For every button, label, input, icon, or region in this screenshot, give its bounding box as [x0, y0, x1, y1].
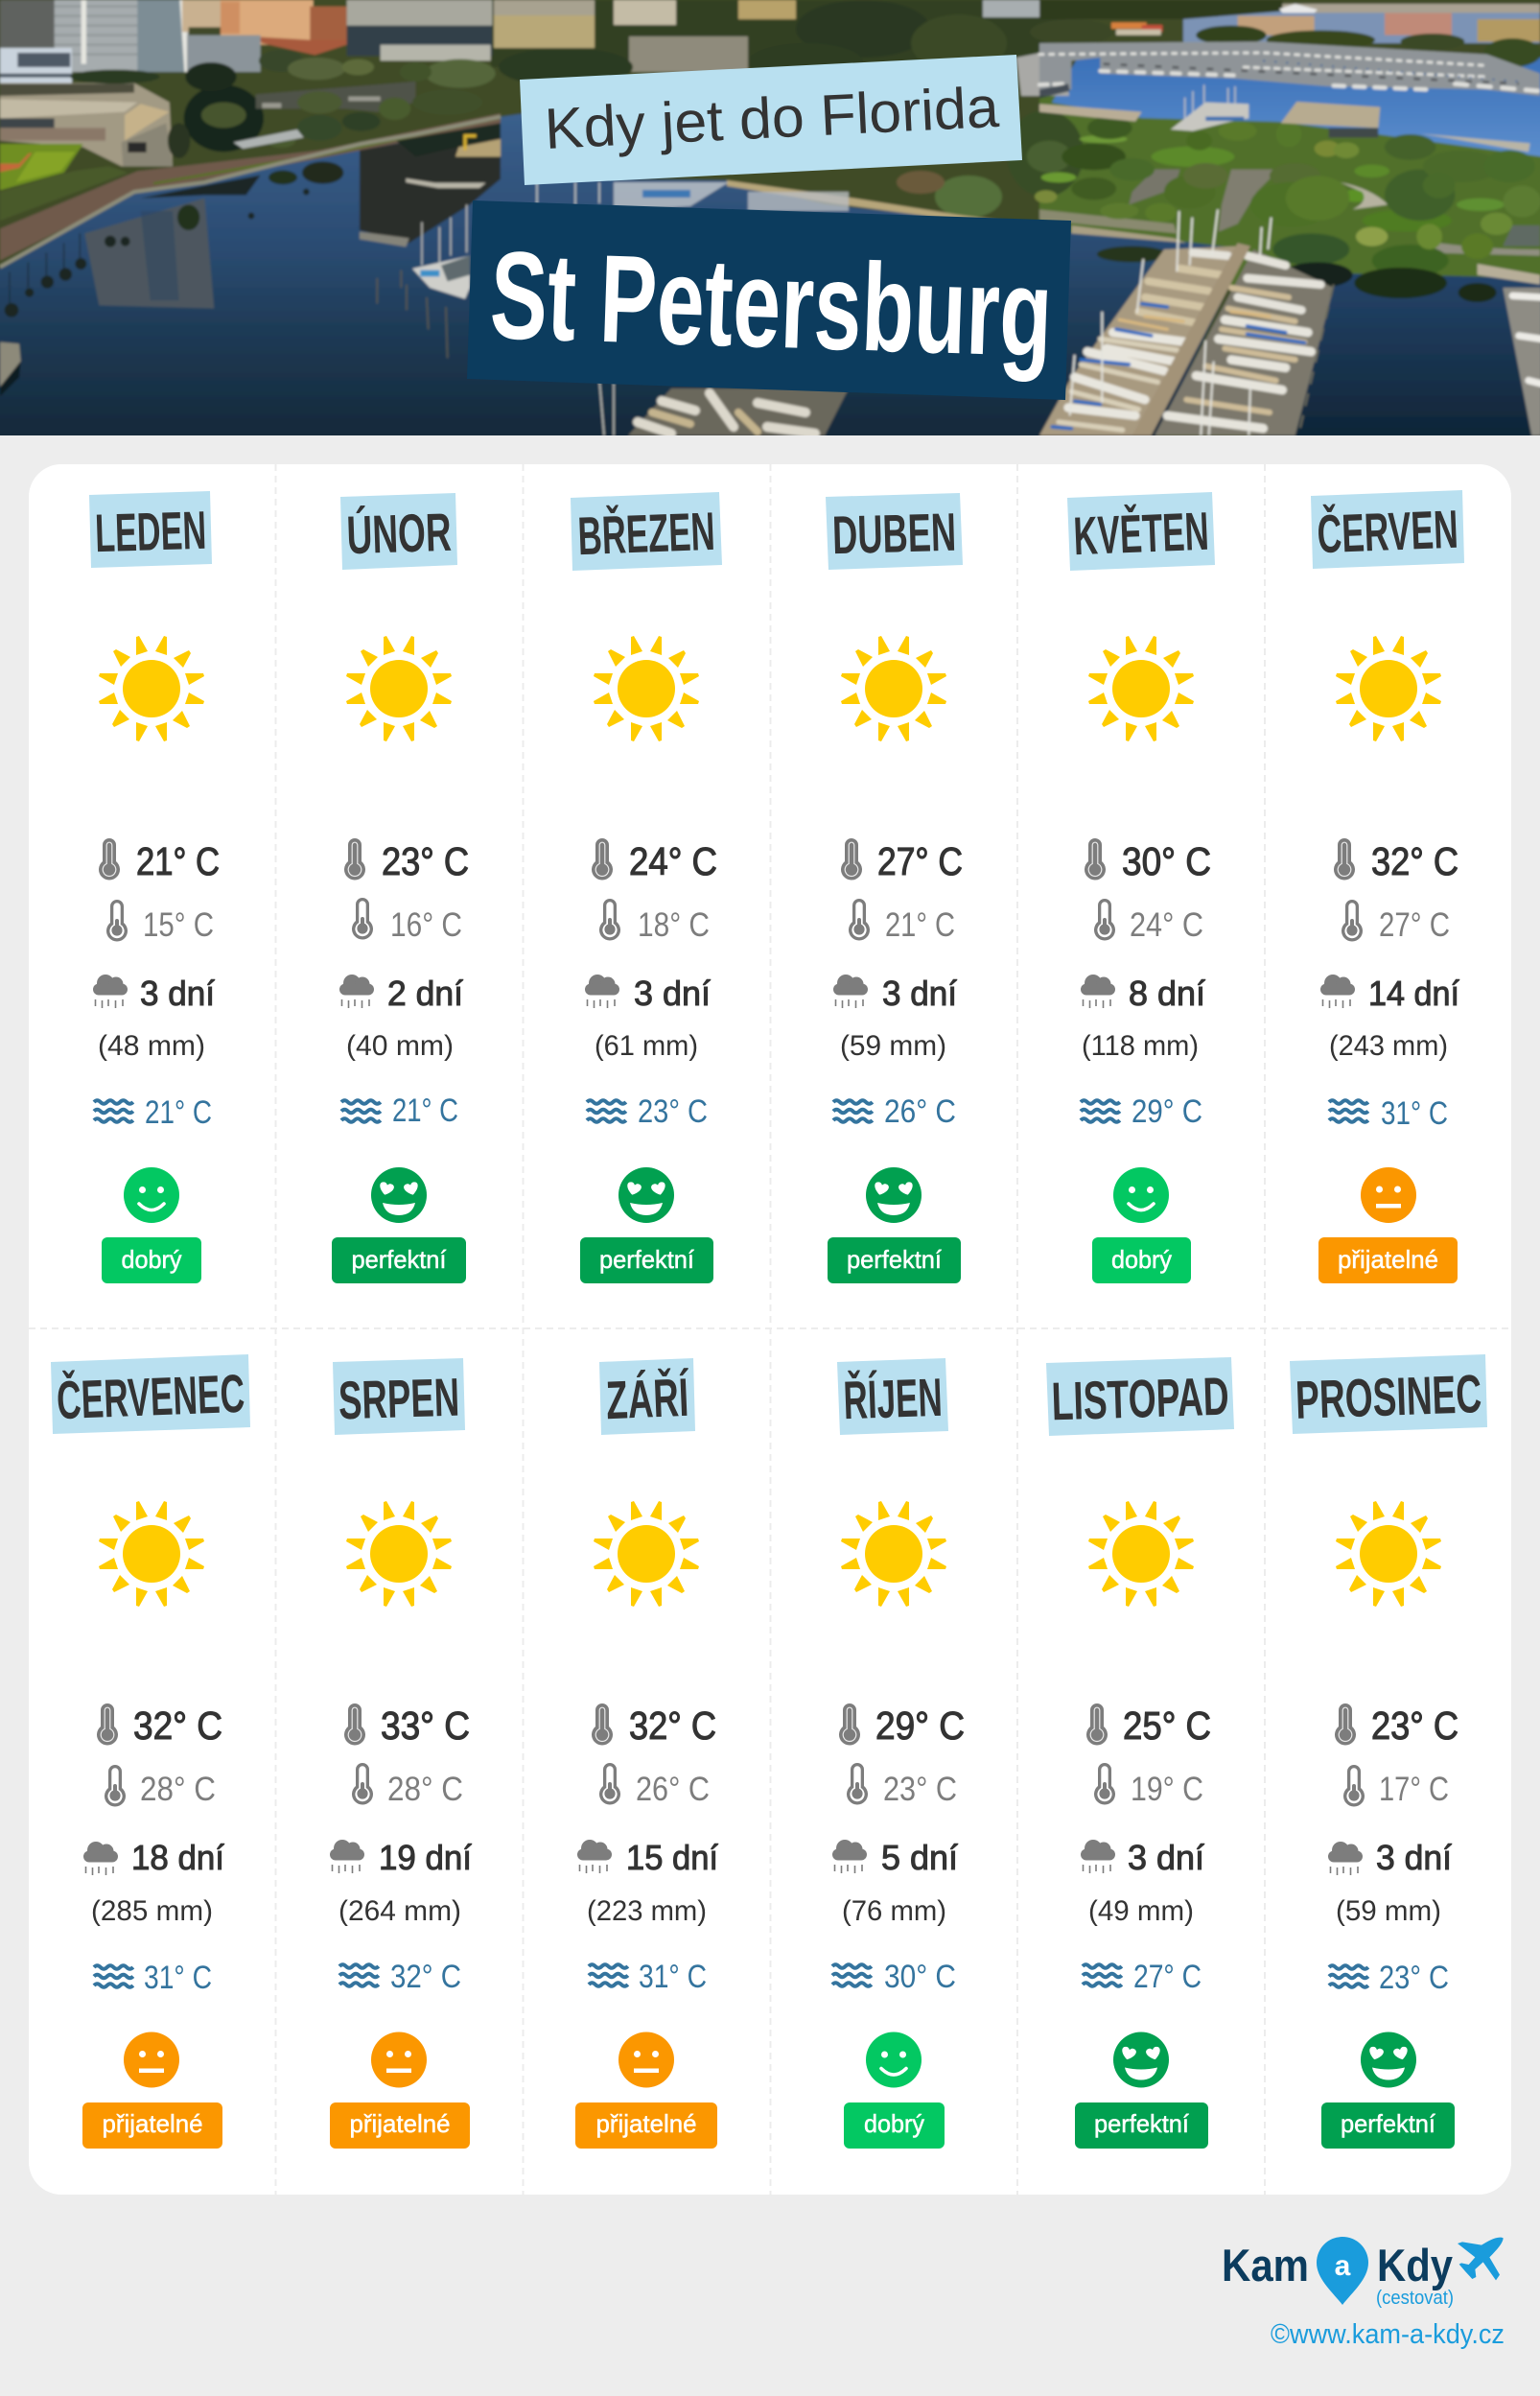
min temperature: [1343, 1765, 1449, 1808]
min temperature: [352, 1763, 463, 1808]
max temperature: [344, 1703, 470, 1748]
min temperature: 17° C: [1379, 1771, 1449, 1808]
max temperature: [1086, 1703, 1211, 1748]
shore: [1071, 225, 1186, 243]
column: LISTOPAD: [1046, 1357, 1234, 2149]
smiley: perfect: [1113, 2032, 1169, 2087]
min temperature: [849, 899, 955, 944]
rain days: [585, 974, 711, 1013]
max temperature: [841, 838, 963, 883]
rain days: 8 dní: [1129, 974, 1205, 1013]
sea temperature: 31° C: [144, 1960, 212, 1996]
column: ČERVEN: [1311, 490, 1464, 1283]
min temperature: 18° C: [638, 906, 710, 944]
badge: perfektní: [828, 1237, 961, 1283]
smiley: good: [1113, 1167, 1169, 1223]
sea temperature: [1329, 1095, 1448, 1132]
month heading: ČERVEN: [1316, 499, 1459, 564]
rain days: [83, 1838, 224, 1877]
month heading: [837, 1358, 948, 1435]
rainfall: (76 mm): [842, 1895, 946, 1927]
badge: dobrý: [1092, 1237, 1191, 1283]
smiley: perfect: [371, 1167, 427, 1223]
rain days: [1328, 1838, 1452, 1877]
dark trees by stadium: [184, 84, 264, 152]
smiley: perfect: [618, 1167, 674, 1223]
month heading: ZÁŘÍ: [605, 1367, 690, 1430]
far right boats: [1503, 288, 1540, 435]
logo: Kam a Kdy (cestovat): [1222, 2237, 1504, 2309]
title banner: Kdy jet do Florida: Kdy jet do Florida: [543, 75, 1001, 161]
badge: přijatelné: [330, 2102, 470, 2149]
rain days: [339, 974, 463, 1013]
max temperature: [1334, 838, 1458, 883]
sea temperature: [1081, 1093, 1202, 1130]
min temperature: [1094, 899, 1203, 944]
sea temperature: 31° C: [1381, 1095, 1448, 1132]
min temperature: [1342, 900, 1450, 944]
max temperature: 27° C: [877, 839, 963, 883]
trees upper: [258, 57, 263, 65]
icon: sun: [99, 636, 204, 741]
badge: dobrý: dobrý: [121, 1245, 182, 1274]
stadium: [0, 83, 173, 166]
sea temperature: [833, 1093, 956, 1130]
top band: [1039, 0, 1282, 19]
icon: sun: [1088, 636, 1194, 741]
rain days: 18 dní: [131, 1838, 224, 1877]
month heading: SRPEN: [338, 1367, 460, 1430]
rainfall: (59 mm): [840, 1030, 946, 1062]
badge: dobrý: dobrý: [864, 2109, 924, 2138]
max temperature: [592, 838, 717, 883]
rainfall: (223 mm): [587, 1895, 707, 1927]
max temperature: 32° C: [629, 1703, 716, 1748]
min temperature: [1094, 1763, 1203, 1808]
min temperature: 21° C: [885, 906, 955, 944]
rain days: 3 dní: [1128, 1838, 1204, 1877]
rain days: 14 dní: [1368, 974, 1459, 1013]
title banner: St Petersburg: St Petersburg: [488, 224, 1055, 383]
sea temperature: 26° C: [884, 1093, 956, 1130]
rain days: 19 dní: [379, 1838, 472, 1877]
baseball field: [0, 144, 83, 190]
badge: přijatelné: [82, 2102, 222, 2149]
small boats: [406, 178, 486, 188]
reflections: [1354, 268, 1447, 298]
column: PROSINEC: [1290, 1354, 1487, 2149]
rain days: [1320, 974, 1459, 1013]
smiley: perfect: [1361, 2032, 1416, 2087]
month heading: [1067, 492, 1215, 571]
rain days: [833, 974, 957, 1013]
right side park, marina (zoom coordinates): [1027, 0, 1540, 435]
badge: přijatelné: přijatelné: [596, 2109, 696, 2138]
rain days: [330, 1838, 472, 1877]
month heading: [826, 493, 963, 570]
rain days: [1081, 974, 1205, 1013]
boats below title: [628, 388, 849, 435]
badge: perfektní: perfektní: [599, 1245, 695, 1274]
min temperature: 15° C: [143, 906, 214, 944]
calendar card: [29, 464, 1511, 2195]
sea temperature: [94, 1094, 212, 1131]
max temperature: 32° C: [133, 1703, 222, 1748]
title banner: St Petersburg: [467, 200, 1071, 400]
rainfall: (48 mm): [98, 1030, 205, 1062]
month heading: [89, 491, 212, 568]
icon: map pin: a: [1335, 2250, 1351, 2282]
month heading: LEDEN: [94, 500, 207, 563]
smiley: acceptable: [1361, 1167, 1416, 1223]
badge: perfektní: [1075, 2102, 1208, 2149]
min temperature: 23° C: [883, 1771, 957, 1808]
max temperature: [839, 1703, 965, 1748]
icon: sun: [1336, 636, 1441, 741]
sea temperature: [1083, 1959, 1202, 1995]
logo: Kam a Kdy (cestovat): Kdy: [1377, 2240, 1453, 2290]
badge: přijatelné: [575, 2102, 717, 2149]
max temperature: [592, 1703, 716, 1748]
max temperature: 21° C: [136, 839, 220, 883]
sea temperature: 31° C: [639, 1959, 707, 1995]
icon: sun: [1336, 1501, 1441, 1607]
smiley: acceptable: [124, 2032, 179, 2087]
column: DUBEN: [826, 493, 963, 1283]
max temperature: 29° C: [875, 1703, 965, 1748]
sea temperature: [1329, 1960, 1449, 1996]
badge: perfektní: [580, 1237, 713, 1283]
logo: Kam a Kdy (cestovat): Kam: [1222, 2240, 1309, 2290]
badge: přijatelné: přijatelné: [1338, 1245, 1438, 1274]
column: ŘÍJEN: [832, 1358, 965, 2149]
min temperature: 24° C: [1130, 906, 1203, 944]
badge: přijatelné: přijatelné: [349, 2109, 451, 2138]
badge: dobrý: [102, 1237, 201, 1283]
upper marina: [1039, 41, 1540, 96]
badge: perfektní: perfektní: [1341, 2109, 1436, 2138]
min temperature: [105, 1765, 216, 1808]
badge: dobrý: dobrý: [1111, 1245, 1172, 1274]
rain days: 3 dní: [882, 974, 957, 1013]
min temperature: [352, 898, 462, 944]
month heading: LISTOPAD: [1051, 1366, 1230, 1431]
rain days: 3 dní: [634, 974, 711, 1013]
max temperature: 30° C: [1122, 839, 1211, 883]
website url: ©www.kam-a-kdy.cz: [1271, 2319, 1505, 2350]
month heading: KVĚTEN: [1072, 501, 1210, 566]
max temperature: 32° C: [1371, 839, 1458, 883]
min temperature: [599, 899, 710, 944]
max temperature: [1335, 1703, 1458, 1748]
column: LEDEN: [89, 491, 220, 1283]
sea temperature: 23° C: [1379, 1960, 1449, 1996]
max temperature: 24° C: [629, 839, 717, 883]
badge: perfektní: perfektní: [1094, 2109, 1190, 2138]
badge: perfektní: perfektní: [847, 1245, 943, 1274]
sea temperature: 29° C: [1132, 1093, 1202, 1130]
badge: přijatelné: [1318, 1237, 1458, 1283]
min temperature: 16° C: [390, 906, 462, 944]
header photo: St Petersburg marina aerial view: [0, 0, 1540, 451]
badge: přijatelné: přijatelné: [102, 2109, 203, 2138]
icon: sun: [841, 1501, 946, 1607]
month heading: [1290, 1354, 1487, 1434]
month heading: [599, 1358, 695, 1435]
max temperature: [97, 1703, 222, 1748]
sea temperature: [832, 1959, 956, 1995]
badge: dobrý: [844, 2102, 945, 2149]
sea temperature: [341, 1092, 458, 1129]
smiley: acceptable: [618, 2032, 674, 2087]
column: KVĚTEN: [1067, 492, 1215, 1283]
rainfall: (264 mm): [338, 1895, 461, 1927]
month heading: [1311, 490, 1464, 569]
month heading: DUBEN: [831, 502, 957, 565]
column: ÚNOR: [332, 493, 469, 1283]
smiley: good: [866, 2032, 922, 2087]
icon: airplane: [1458, 2238, 1504, 2280]
rainfall: (243 mm): [1329, 1030, 1448, 1062]
icon: map pin: [1317, 2237, 1368, 2305]
max temperature: [344, 838, 469, 883]
rain days: 15 dní: [626, 1838, 718, 1877]
rainfall: (49 mm): [1088, 1895, 1194, 1927]
max temperature: 25° C: [1123, 1703, 1211, 1748]
column: BŘEZEN: [571, 492, 722, 1283]
rain days: [577, 1838, 718, 1877]
sea temperature: [94, 1960, 212, 1996]
badge: perfektní: [1321, 2102, 1455, 2149]
icon: sun: [99, 1501, 204, 1607]
smiley: perfect: [866, 1167, 922, 1223]
rain days: 3 dní: [1376, 1838, 1452, 1877]
trees and grass: [1152, 147, 1234, 167]
rain days: 3 dní: [140, 974, 215, 1013]
month heading: [340, 493, 457, 570]
column: ZÁŘÍ: [575, 1358, 718, 2149]
sea temperature: 32° C: [390, 1959, 461, 1995]
icon: sun: [346, 636, 452, 741]
sea temperature: 23° C: [638, 1093, 708, 1130]
month heading: ÚNOR: [346, 502, 453, 565]
max temperature: 33° C: [381, 1703, 470, 1748]
column: ČERVENEC: [51, 1354, 250, 2149]
rainfall: (59 mm): [1336, 1895, 1441, 1927]
rain days: [832, 1838, 958, 1877]
rainfall: (40 mm): [346, 1030, 454, 1062]
month heading: [333, 1358, 465, 1435]
min temperature: 28° C: [140, 1771, 216, 1808]
rain days: 5 dní: [881, 1838, 958, 1877]
logo: Kam a Kdy (cestovat): (cestovat): [1376, 2288, 1454, 2309]
max temperature: [1085, 838, 1211, 883]
min temperature: [106, 900, 214, 944]
min temperature: [599, 1763, 710, 1808]
left side city (zoom coordinates): [0, 0, 501, 396]
left bottom pier: [0, 342, 21, 387]
max temperature: 23° C: [1371, 1703, 1458, 1748]
rainfall: (118 mm): [1082, 1030, 1199, 1062]
rain days: 2 dní: [387, 974, 463, 1013]
min temperature: 19° C: [1131, 1771, 1203, 1808]
marina big: [1039, 247, 1238, 435]
icon: sun: [346, 1501, 452, 1607]
min temperature: 27° C: [1379, 906, 1450, 944]
title banner: Kdy jet do Florida: [520, 55, 1022, 185]
column: SRPEN: [330, 1358, 472, 2149]
spur marina: [1171, 103, 1248, 131]
middle area: [494, 14, 595, 48]
max temperature: 23° C: [382, 839, 469, 883]
month heading: BŘEZEN: [576, 501, 716, 566]
sea temperature: [589, 1959, 707, 1995]
icon: sun: [1088, 1501, 1194, 1607]
month heading: [51, 1354, 250, 1434]
rainfall: (61 mm): [595, 1030, 698, 1062]
roofs: [1281, 102, 1380, 128]
sea temperature: [587, 1093, 708, 1130]
min temperature: 26° C: [636, 1771, 710, 1808]
month heading: [1046, 1357, 1234, 1436]
rain days: [1081, 1838, 1204, 1877]
road & wall: [0, 113, 501, 261]
min temperature: [847, 1763, 957, 1808]
month heading: ŘÍJEN: [843, 1367, 944, 1430]
tower reflection in water: [84, 199, 214, 309]
badge: perfektní: perfektní: [351, 1245, 447, 1274]
smiley: good: [124, 1167, 179, 1223]
sea temperature: 21° C: [392, 1092, 458, 1129]
min temperature: 28° C: [387, 1771, 463, 1808]
rain days: [93, 974, 215, 1013]
max temperature: [99, 838, 220, 883]
month heading: [571, 492, 722, 571]
sea temperature: 27° C: [1133, 1959, 1202, 1995]
sea temperature: 21° C: [145, 1094, 212, 1131]
sea temperature: [339, 1959, 461, 1995]
rainfall: (285 mm): [91, 1895, 213, 1927]
month heading: ČERVENEC: [56, 1363, 245, 1430]
smiley: acceptable: [371, 2032, 427, 2087]
badge: perfektní: [332, 1237, 466, 1283]
icon: sun: [594, 1501, 699, 1607]
icon: sun: [841, 636, 946, 741]
icon: sun: [594, 636, 699, 741]
sea temperature: 30° C: [884, 1959, 956, 1995]
